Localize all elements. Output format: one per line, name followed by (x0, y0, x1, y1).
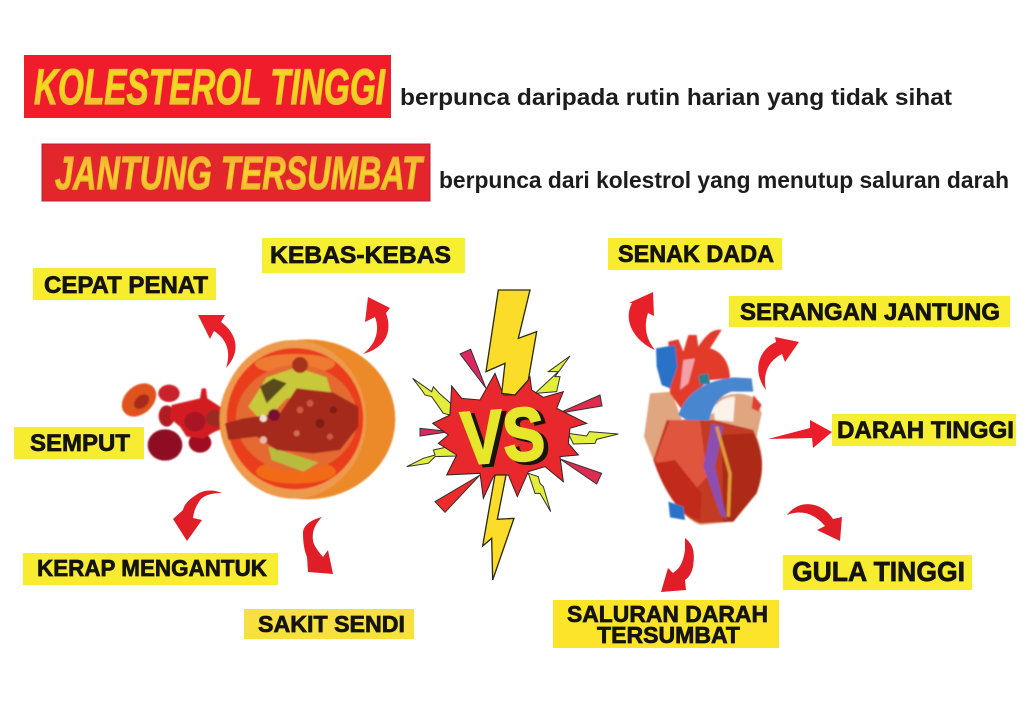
illustration: VS clash burst (407, 290, 618, 580)
banner: Jantung Tersumbat: JANTUNG TERSUMBAT (55, 147, 425, 199)
blood cells (115, 377, 237, 461)
banner: Jantung Tersumbat (42, 144, 430, 201)
lightning bolt bottom (483, 475, 514, 580)
VS letters: VS (458, 391, 547, 481)
label: Saluran Darah Tersumbat (553, 600, 779, 648)
arrow: to Kerap Mengantuk (173, 491, 222, 541)
label: Semput (14, 427, 144, 459)
coronary vessels (703, 423, 727, 520)
label: Kebas-Kebas (262, 238, 465, 273)
label: Saluran Darah Tersumbat: TERSUMBAT (597, 622, 740, 648)
arrow: to Saluran Darah Tersumbat (661, 538, 694, 592)
VS letters: VS (463, 393, 552, 483)
cholesterol clot (225, 388, 358, 453)
illustration: blocked artery with blood cells (115, 339, 395, 499)
great vessels (656, 330, 753, 421)
arrow: to Gula Tinggi (787, 504, 842, 541)
illustration: human heart (644, 330, 762, 525)
starburst (433, 373, 587, 498)
arrow: to Kebas-Kebas (363, 297, 390, 354)
text: cause of high cholesterol: berpunca daripada rutin harian yang tidak sihat (400, 84, 952, 110)
label: Serangan Jantung: SERANGAN JANTUNG (740, 299, 1000, 326)
label: Gula Tinggi: GULA TINGGI (792, 556, 965, 587)
label: Kerap Mengantuk: KERAP MENGANTUK (37, 555, 267, 581)
label: Kebas-Kebas: KEBAS-KEBAS (270, 242, 451, 269)
label: Cepat Penat: CEPAT PENAT (44, 272, 208, 299)
label: Saluran Darah Tersumbat: SALURAN DARAH (567, 601, 768, 627)
arrow: to Sakit Sendi (303, 517, 333, 574)
label: Semput: SEMPUT (30, 430, 130, 457)
label: Darah Tinggi: DARAH TINGGI (837, 417, 1014, 444)
banner: Kolesterol Tinggi: KOLESTEROL TINGGI (34, 59, 386, 115)
label: Sakit Sendi: SAKIT SENDI (258, 611, 405, 637)
heart body (644, 392, 762, 525)
lightning bolt top (486, 290, 537, 395)
arrow: to Cepat Penat (198, 315, 236, 368)
fatty plaque (248, 367, 332, 423)
arrow: to Serangan Jantung (758, 337, 799, 390)
arrow: to Senak Dada (629, 292, 655, 350)
text: cause of blocked heart: berpunca dari kolestrol yang menutup saluran darah (439, 167, 1009, 193)
small rays and sparks (407, 349, 618, 512)
label: Senak Dada: SENAK DADA (618, 241, 774, 268)
banner: Kolesterol Tinggi (24, 55, 391, 118)
arrow: to Darah Tinggi (768, 420, 832, 448)
artery wall (219, 339, 395, 499)
